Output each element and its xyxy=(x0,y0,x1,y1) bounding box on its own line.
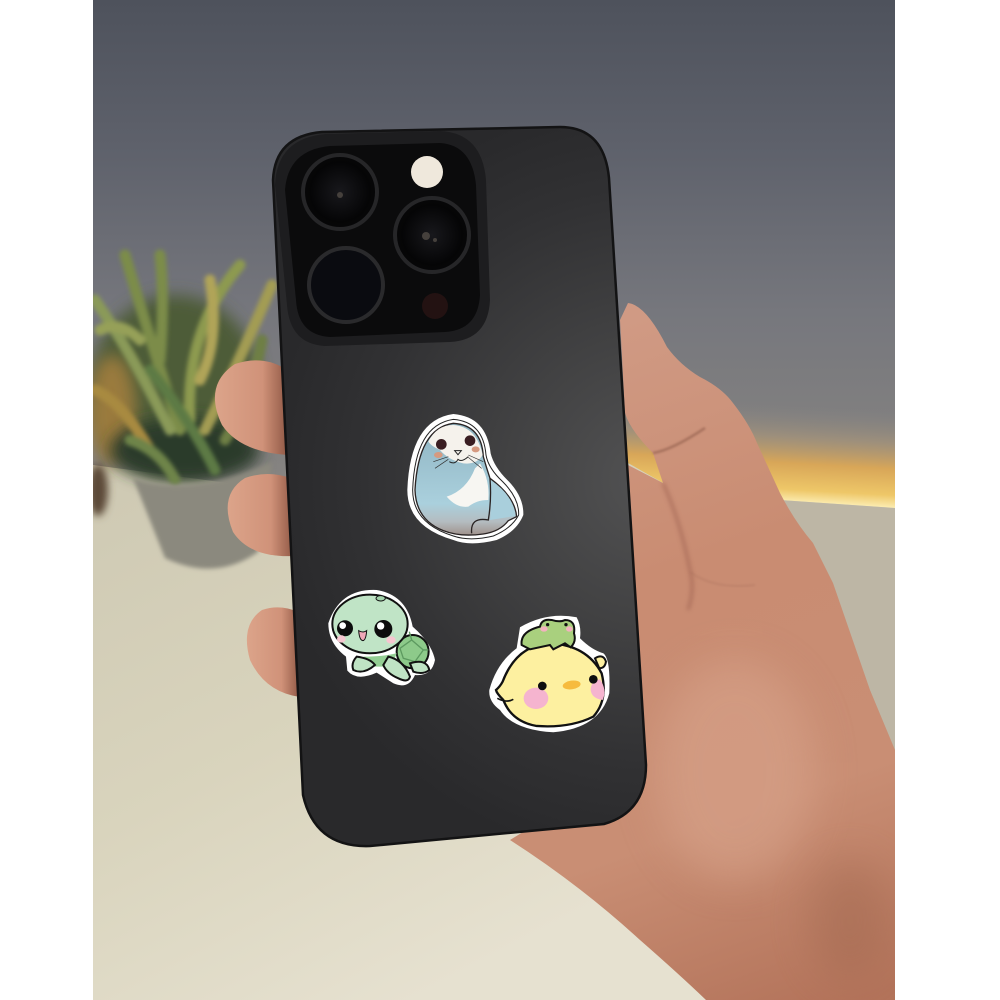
sticker: chick with frog xyxy=(489,616,610,732)
wall xyxy=(93,0,895,520)
frog face xyxy=(540,626,573,632)
finger: lower xyxy=(247,607,300,697)
sticker border xyxy=(407,414,523,543)
camera island xyxy=(275,131,490,346)
sensor xyxy=(422,293,448,319)
plant pot xyxy=(133,462,272,569)
turtle shell pattern xyxy=(400,632,428,668)
sticker: turtle xyxy=(328,590,435,685)
turtle cheeks xyxy=(337,635,396,644)
seal muzzle xyxy=(449,451,468,463)
lens top xyxy=(303,155,377,229)
eye highlights xyxy=(339,622,384,630)
finger: middle xyxy=(228,474,294,556)
turtle mouth xyxy=(359,631,367,641)
lens right xyxy=(395,198,469,272)
thumb web crease xyxy=(663,483,692,610)
warm glow on wall xyxy=(626,416,895,508)
turtle shell xyxy=(397,635,429,668)
frog eyes xyxy=(546,623,568,626)
seal whiskers xyxy=(433,455,483,468)
flash xyxy=(411,156,443,188)
plant foliage xyxy=(90,295,260,475)
chick body xyxy=(496,643,604,726)
thumb crease xyxy=(653,428,705,453)
seal tail xyxy=(490,480,515,520)
plant xyxy=(88,255,272,569)
palm line xyxy=(690,572,755,586)
chick wing xyxy=(497,698,513,701)
thin outline ring xyxy=(413,419,519,539)
seal flipper line xyxy=(472,478,491,533)
turtle eyes xyxy=(337,620,392,638)
chick tail xyxy=(595,656,606,668)
palm shading xyxy=(662,668,880,956)
seal cheeks xyxy=(434,446,480,458)
turtle head spot xyxy=(376,596,385,601)
sticker border xyxy=(489,616,610,732)
lens glints xyxy=(337,192,437,242)
chick eyes xyxy=(538,675,598,690)
camera island inner xyxy=(285,143,480,337)
shaded floor on right xyxy=(784,500,895,750)
chick cheeks xyxy=(524,679,604,709)
finger: upper xyxy=(215,360,288,455)
sticker border xyxy=(328,590,435,685)
hand behind phone xyxy=(215,303,895,1000)
turtle body xyxy=(363,653,397,667)
turtle head xyxy=(332,595,408,653)
seal face xyxy=(428,425,483,464)
turtle back flipper xyxy=(410,662,429,673)
turtle front flippers xyxy=(353,657,410,680)
lens bottom xyxy=(309,248,383,322)
frog xyxy=(522,620,575,649)
seal body xyxy=(415,423,517,535)
palm and thumb xyxy=(510,303,895,1000)
sticker: seal xyxy=(407,414,523,543)
seal eyes xyxy=(436,435,475,450)
chick beak xyxy=(562,679,581,691)
phone xyxy=(273,127,646,846)
phone body xyxy=(273,127,646,846)
floor surface xyxy=(93,463,895,1000)
seal belly xyxy=(447,463,489,507)
